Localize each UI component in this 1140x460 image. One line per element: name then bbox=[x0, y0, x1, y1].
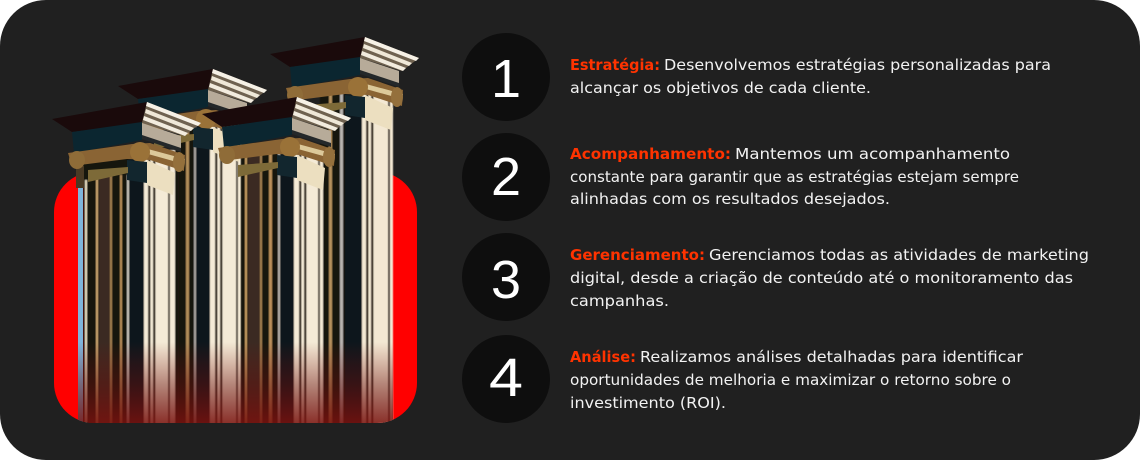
text: Gerenciamento: Gerenciamento: bbox=[570, 246, 705, 264]
text: Gerenciamento bbox=[570, 246, 1089, 310]
red fade at base of columns bbox=[78, 342, 393, 425]
column 4 bbox=[320, 88, 393, 425]
text: Análise bbox=[570, 348, 1024, 412]
text: Gerenciamento: Gerenciamos todas as atividades de marketing bbox=[709, 246, 1089, 264]
capital 4 bbox=[270, 37, 419, 130]
text: Acompanhamento bbox=[570, 145, 1019, 208]
item 1 bbox=[462, 33, 1051, 121]
item 2 bbox=[462, 133, 1019, 221]
number badge 4: 4 bbox=[489, 348, 523, 408]
text: Acompanhamento: constante para garantir que as estratégias estejam sempre bbox=[570, 168, 1019, 186]
text: Análise: oportunidades de melhoria e maximizar o retorno sobre o bbox=[570, 371, 1011, 389]
text: Gerenciamento: campanhas. bbox=[570, 292, 669, 310]
text: Acompanhamento: Acompanhamento: bbox=[570, 145, 731, 163]
column 3 bbox=[241, 150, 325, 425]
number badge 3 bbox=[462, 233, 550, 321]
text: Estratégia bbox=[570, 56, 1051, 97]
number badge 2 bbox=[462, 133, 550, 221]
column 2 bbox=[178, 120, 248, 425]
text: Análise: Análise: bbox=[570, 348, 636, 366]
text: Análise: Realizamos análises detalhadas para identificar bbox=[640, 348, 1024, 366]
item 3 bbox=[462, 233, 1089, 321]
capital 1 bbox=[52, 102, 201, 195]
red rounded panel bbox=[54, 172, 417, 423]
number badge 1: 1 bbox=[491, 49, 521, 109]
number badge 2: 2 bbox=[491, 147, 521, 207]
text: Acompanhamento: Mantemos um acompanhamento bbox=[735, 145, 1010, 163]
text: Acompanhamento: alinhadas com os resultados desejados. bbox=[570, 190, 890, 208]
number badge 4 bbox=[462, 335, 550, 423]
item 4 bbox=[462, 335, 1024, 423]
number badge 3: 3 bbox=[491, 250, 521, 310]
column 1 bbox=[76, 150, 179, 425]
capital 3 bbox=[202, 97, 351, 190]
capital 2 bbox=[118, 69, 267, 162]
number badge 1 bbox=[462, 33, 550, 121]
illustration: classical columns on red panel bbox=[52, 37, 419, 425]
text: Estratégia: Desenvolvemos estratégias personalizadas para bbox=[664, 56, 1051, 74]
text: Gerenciamento: digital, desde a criação de conteúdo até o monitoramento das bbox=[570, 269, 1073, 287]
text: Análise: investimento (ROI). bbox=[570, 394, 726, 412]
text: Estratégia: Estratégia: bbox=[570, 56, 660, 74]
text: Estratégia: alcançar os objetivos de cada cliente. bbox=[570, 79, 871, 97]
